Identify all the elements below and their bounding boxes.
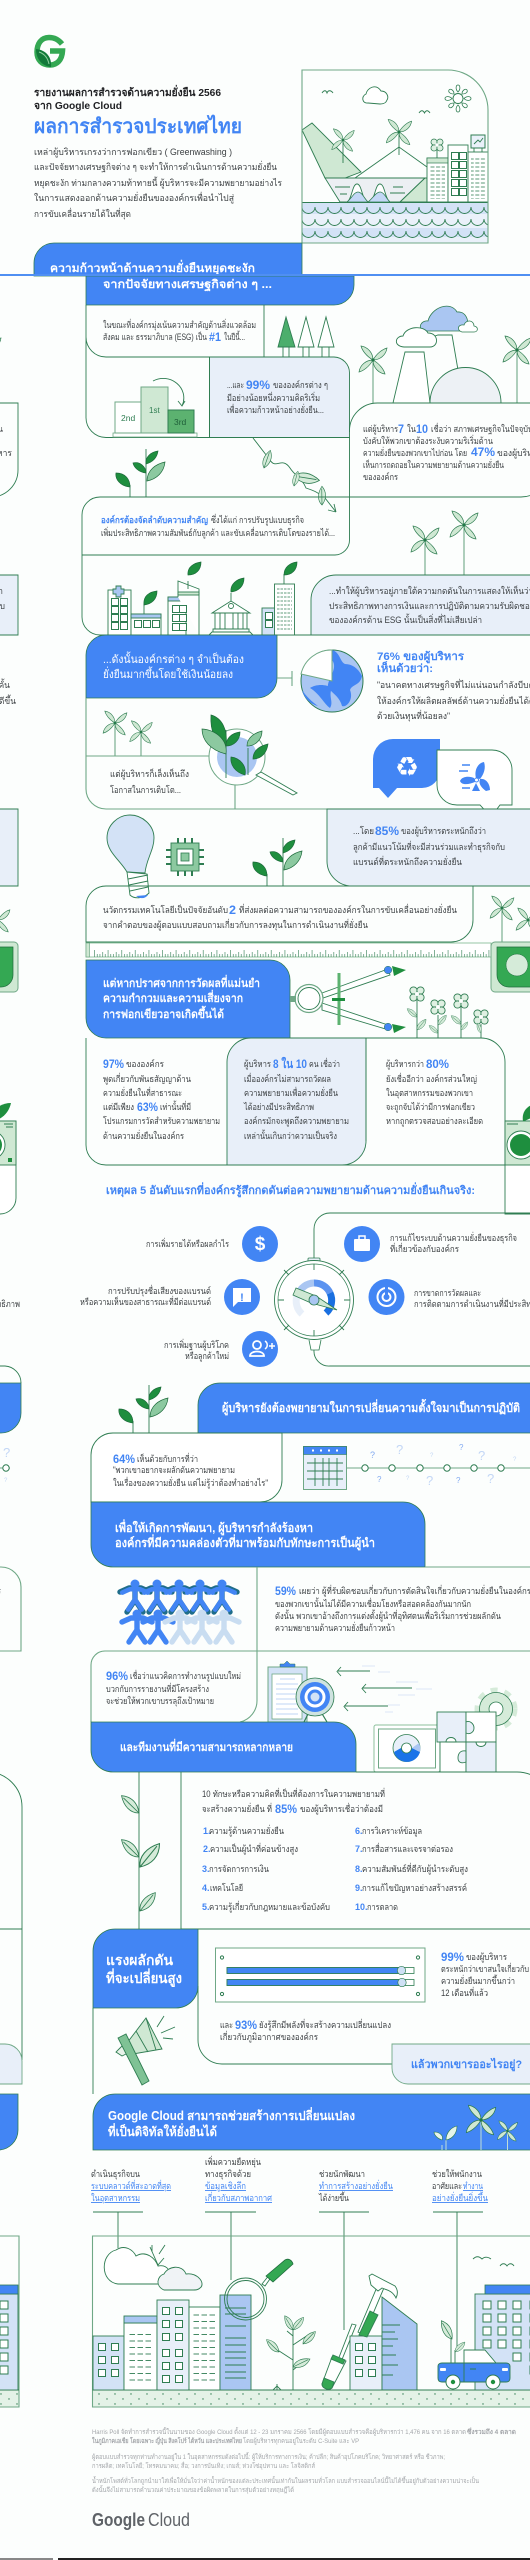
illustration: city frame — [92, 2236, 530, 2407]
column: clean cloud: ระบบคลาวด์ที่สะอาดที่สุด — [91, 2179, 171, 2192]
footer notes — [92, 2426, 516, 2494]
column: employees: อาศัยและ — [432, 2181, 462, 2191]
chart: sliders — [216, 1948, 425, 2002]
text: organisations must prioritise: ซึ่งได้แก่ การปรับรูปแบบธุรกิจ — [211, 513, 304, 526]
callout: what are they waiting for — [392, 2044, 530, 2084]
panel: diverse teams: และทีมงานที่มีความสามารถหลากหลาย — [120, 1738, 293, 1754]
main body, shifted slice that wraps at the right edge — [80, 276, 530, 2407]
icon: lightbulb — [107, 815, 154, 898]
panel: without accurate measurement: ความกำกวมและความเสี่ยงจาก — [103, 989, 243, 1005]
icon: megaphone — [116, 2016, 175, 2085]
reason: new customers — [164, 1331, 278, 1367]
text: 59%: 59% — [275, 1584, 296, 1598]
icon: compass — [290, 966, 406, 1033]
column: climate insights: ข้อมูลเชิงลึก — [205, 2181, 246, 2192]
text: 76% of executives: เห็นด้วยว่า: — [377, 661, 433, 675]
panel: 85% customers: ลูกค้ามีแนวโน้มที่จะมีส่วนร่วมและทำธุรกิจกับ — [353, 840, 505, 853]
footer notes: ผู้ตอบแบบสำรวจทุกท่านทำงานอยู่ใน 1 ในอุตสาหกรรมดังต่อไปนี้: ผู้ให้บริการทางการเงิน; ค้าปลีก; สินค้าอุปโภคบริโภค; วิทยาศาสตร์ หรือ ชีวภาพ; — [92, 2452, 445, 2461]
list: skills one to five: 4. — [202, 1883, 210, 1893]
truck — [437, 2285, 530, 2390]
icon: clipboard and target with arrows — [268, 1661, 432, 1722]
panel: ESG outline — [86, 305, 350, 438]
text: 8 in 10: ได้อย่างมีประสิทธิภาพ — [243, 1102, 314, 1112]
list: skills six to ten: การแก้ไขปัญหาอย่างสร้างสรรค์ — [362, 1882, 467, 1893]
icon: sprout — [116, 449, 165, 497]
list: skills six to ten: การสื่อสารและเจรจาต่อรอง — [362, 1842, 453, 1854]
panel: 7 in 10 and priorities outline — [82, 403, 530, 635]
text: 80% — [386, 1057, 483, 1127]
text: ESG number one: ในขณะที่องค์กรมุ่งเน้นความสำคัญด้านสิ่งแวดล้อม — [103, 318, 256, 331]
title block — [34, 84, 242, 138]
column: clean cloud: ดำเนินธุรกิจบน — [91, 2169, 140, 2180]
text: 96% — [106, 1669, 241, 1707]
column: climate insights: เพิ่มความยืดหยุ่น — [205, 2155, 261, 2168]
text: 99% executives — [441, 1950, 529, 1998]
text: 80%: 80% — [426, 1057, 449, 1071]
column: employees — [432, 2169, 488, 2350]
text: 7 in 10: ขององค์กร — [363, 471, 398, 482]
icon: calendar timeline with question marks — [304, 1442, 530, 1490]
chart: globe pie 76% — [301, 650, 363, 712]
panel: high drive to change — [93, 1929, 198, 2008]
text: 8 in 10: คน เชื่อว่า — [309, 1057, 340, 1069]
text: 97% and 63%: 97% — [103, 1057, 124, 1071]
text: 96%: เชื่อว่าแนวคิดการทำงานรูปแบบใหม่ — [130, 1669, 241, 1682]
text: 99% executives: 99% — [441, 1950, 464, 1964]
text: 99%: 99% — [246, 378, 270, 392]
panel: 85% customers: ...โดย — [353, 826, 374, 836]
text: 76% of executives: ด้วยเงินทุนที่น้อยลง" — [377, 709, 450, 722]
text: 93%: ยังรู้สึกมีพลังที่จะสร้างความเปลี่ยนแปลง — [259, 2018, 391, 2031]
list: skills six to ten — [355, 1825, 468, 1912]
icon: sprout — [119, 1385, 168, 1433]
list: skills one to five: 5. — [202, 1902, 210, 1912]
text: 97% and 63%: พูดเกี่ยวกับพันธสัญญาด้าน — [103, 1072, 191, 1085]
column: developers — [318, 2169, 393, 2330]
list: skills one to five: 1. — [203, 1826, 211, 1836]
banner: Google Cloud can help — [93, 2094, 530, 2150]
intro paragraph — [34, 147, 282, 220]
logo: Google Cloud: Cloud — [148, 2510, 190, 2530]
plant — [266, 2316, 315, 2390]
text: 7 in 10: แต่ผู้บริหาร — [363, 424, 398, 435]
reason: lack of measurement — [368, 1279, 530, 1315]
icon: calendar timeline with question marks: ? — [377, 1475, 382, 1484]
column: climate insights: เกี่ยวกับสภาพอากาศ — [205, 2191, 272, 2203]
icon: magnifier with leaves — [202, 715, 297, 795]
icon: calendar timeline with question marks: ? — [487, 1471, 494, 1486]
heading bar top slice: ความก้าวหน้าด้านความยั่งยืนหยุดชะงัก — [50, 259, 255, 276]
intro paragraph: การขับเคลื่อนรายได้ในที่สุด — [34, 207, 131, 220]
panel: 85% customers — [327, 809, 530, 886]
text: 76% of executives: 76% ของผู้บริหาร — [377, 650, 464, 664]
icon: recycle speech bubble: ♻ — [395, 752, 419, 783]
column: employees: ช่วยให้พนักงาน — [432, 2169, 482, 2179]
text: 7 in 10: 7 — [398, 422, 404, 436]
intro paragraph: และปัจจัยทางเศรษฐกิจต่าง ๆ จะทำให้การดำเนินการด้านความยั่งยืน — [34, 160, 277, 173]
column: employees: อย่างยั่งยืนยิ่งขึ้น — [432, 2191, 488, 2203]
column: climate insights: ทางธุรกิจด้วย — [205, 2169, 251, 2180]
panel: agile organisations: เพื่อให้เกิดการพัฒนา, ผู้บริหารกำลังร้องหา — [115, 1519, 313, 1536]
intro paragraph: เหล่าผู้บริหารเกรงว่าการฟอกเขียว ( Greenwashing ) — [34, 147, 232, 158]
panel: 85% customers: ของผู้บริหารตระหนักถึงว่า — [401, 826, 486, 837]
text: ten skills intro: จะสร้างความยั่งยืน ที่ — [202, 1802, 272, 1814]
text: 8 in 10: ผู้บริหาร — [244, 1059, 271, 1070]
text: 96%: 96% — [106, 1669, 128, 1683]
icon: trees — [278, 317, 334, 357]
footer notes: น้ำหนักโพสต์ทั่วโลกถูกนำมาใส่เพื่อให้มั่นใจว่าค่าน้ำหนักของแต่ละประเทศนั้นเท่ากันในผลรวมทั่วโลก แบบสำรวจออนไลน์นี้ไม่ได้ขึ้นอยู่กับตัวอย่างความน่าจะเป็น — [92, 2476, 479, 2485]
text: 96%: บวกกับการรายงานที่มีโครงสร้าง — [106, 1682, 209, 1694]
text: organisations must prioritise — [101, 513, 335, 539]
reason: revenue: $ — [255, 1234, 266, 1255]
panel: 99% pale box — [210, 357, 350, 438]
text: 59%: ของพวกเขานั้นไม่ได้มีความเชื่อมโยงหรือสอดคล้องกันมากนัก — [275, 1597, 471, 1609]
text: 76% of executives — [377, 650, 530, 722]
panel: 64%: ในเรื่องของความยั่งยืน แต่ไม่รู้ว่าต้องทำอย่างไร" — [113, 1476, 268, 1489]
column: employees: ทำงาน — [463, 2181, 483, 2191]
text: opportunities: แต่ผู้บริหารก็เล็งเห็นถึง — [110, 767, 189, 780]
icon: calendar timeline with question marks: ? — [426, 1473, 433, 1488]
illustration: factory — [393, 306, 501, 403]
panel: pressure on executives — [311, 575, 530, 635]
title block: รายงานผลการสำรวจด้านความยั่งยืน 2566 — [34, 84, 221, 99]
text: 7 in 10: 10 — [416, 422, 428, 436]
list: skills one to five: ความรู้เกี่ยวกับกฎหมายและข้อบังคับ — [209, 1900, 330, 1913]
stripe across slice seam — [0, 274, 530, 276]
icon: windmills by factory — [359, 336, 530, 403]
panel outline: ten skills — [139, 1772, 530, 2060]
logo: Google Cloud — [92, 2510, 190, 2530]
panel: high drive to change: แรงผลักดัน — [106, 1952, 173, 1968]
text: 96%: จะช่วยให้พวกเขาบรรลุถึงเป้าหมาย — [106, 1696, 214, 1707]
column: clean cloud — [91, 2169, 171, 2248]
text: 99% executives: ความยั่งยืนมากขึ้นกว่า — [441, 1974, 515, 1986]
panel: without accurate measurement — [86, 960, 290, 1038]
icon: calendar timeline with question marks: ? — [456, 1476, 461, 1485]
list: skills one to five: ความรู้ด้านความยั่งยืน — [209, 1824, 284, 1837]
screwdriver — [322, 2324, 356, 2389]
text: ten skills intro: 10 ทักษะหรือความคิดที่เป็นที่ต้องการในความพยายามที่ — [202, 1787, 385, 1799]
text: 80%: หากถูกตรวจสอบอย่างละเอียด — [386, 1116, 483, 1127]
icon: calendar timeline with question marks: ? — [370, 1450, 375, 1460]
icon: sprout — [253, 838, 302, 886]
text: ten skills intro: 85% — [275, 1802, 297, 1816]
panel: 64%: "พวกเขาอยากจะผลักดันความพยายาม — [113, 1465, 235, 1475]
list: skills one to five: เทคโนโลยี — [210, 1883, 243, 1893]
list: skills six to ten: 8. — [355, 1864, 363, 1874]
panel: diverse teams — [91, 1722, 356, 1772]
intro paragraph: หยุดชะงัก ท่ามกลางความท้าทายนี้ ผู้บริหารจะมีความพยายามอย่างไร — [34, 176, 282, 189]
text: opportunities — [110, 767, 189, 795]
text: 99% executives: 12 เดือนที่แล้ว — [441, 1986, 488, 1998]
text: ESG number one: #1 — [209, 330, 221, 344]
text: 80%: ผู้บริหารกว่า — [386, 1059, 424, 1070]
text: 99%: ขององค์กรต่าง ๆ — [273, 379, 328, 390]
text: 93%: เกี่ยวกับภูมิอากาศขององค์กร — [220, 2030, 318, 2043]
panel outline: 59% — [91, 1567, 530, 1722]
text: 97% and 63%: ขององค์กร — [126, 1058, 164, 1069]
text: 8 in 10: องค์กรมักจะพูดถึงความพยายาม — [244, 1115, 349, 1127]
panel: without accurate measurement: แต่หากปราศจากการวัดผลที่แม่นยำ — [103, 974, 260, 990]
footer notes: ในภูมิภาคเอเชีย โดยเฉพาะ ญี่ปุ่น สิงคโปร์ ไต้หวัน และประเทศไทย — [92, 2435, 242, 2446]
panel: 64% — [91, 1433, 282, 1502]
reason: revenue — [146, 1226, 278, 1262]
text: 99% executives: ของผู้บริหาร — [466, 1952, 507, 1963]
text: 97% and 63%: 63% — [137, 1100, 158, 1114]
callout: what are they waiting for: แล้วพวกเขารออะไรอยู่? — [411, 2057, 522, 2072]
panel: 64%: เห็นด้วยกับการที่ว่า — [137, 1452, 198, 1464]
chart: podium: 2nd — [121, 413, 135, 423]
hammer — [358, 2274, 397, 2337]
logo: Google Cloud: Google — [92, 2510, 145, 2530]
list: skills six to ten: 7. — [355, 1844, 363, 1854]
icon: monitor with donut chart — [374, 1725, 440, 1772]
text: 8 in 10: เหล่านั้นเกินกว่าความเป็นจริง — [244, 1129, 337, 1141]
text: 59%: ความพยายามด้านความยั่งยืนก้าวหน้า — [275, 1621, 395, 1633]
panel: technology ranked 2: 2 — [229, 903, 236, 917]
text: ten skills intro — [202, 1787, 385, 1816]
icon: people chain — [120, 1580, 239, 1642]
icon: calendar timeline with question marks: ? — [396, 1442, 403, 1457]
list: skills one to five: ความเป็นผู้นำที่ค่อนข้างสูง — [210, 1842, 298, 1855]
text: 99% — [227, 378, 328, 415]
list: skills one to five: 2. — [203, 1844, 211, 1854]
reason: brand reputation: การปรับปรุงชื่อเสียงของแบรนด์ — [108, 1284, 211, 1297]
icon: recycle speech bubble — [373, 739, 440, 798]
reason: revenue: การเพิ่มรายได้หรือผลกำไร — [146, 1237, 229, 1249]
list: skills six to ten: การตลาด — [367, 1902, 398, 1912]
intro paragraph: ในการแสดงออกด้านความยั่งยืนขององค์กรเพื่อนำไปสู่ — [34, 191, 234, 204]
text: 7 in 10 — [363, 422, 530, 482]
column: clean cloud: ในอุตสาหกรรม — [91, 2193, 140, 2204]
panel: so organisations must be more sustainable: ยั่งยืนมากขึ้นโดยใช้เงินน้อยลง — [103, 666, 233, 681]
icon: windmills over pale panel — [411, 511, 478, 575]
text: 7 in 10: ความยั่งยืนของพวกเขาไปก่อน โดย — [363, 446, 467, 458]
text: 7 in 10: ใน — [407, 424, 416, 434]
title block: ผลการสำรวจประเทศไทย — [34, 114, 242, 138]
panel: agile organisations: องค์กรที่มีความคล่องตัวที่มาพร้อมกับทักษะการเป็นผู้นำ — [115, 1534, 375, 1551]
panel: 85% customers: แบรนด์ที่ตระหนักถึงความยั่งยืน — [353, 855, 462, 867]
heading: top 5 reasons: เหตุผล 5 อันดับแรกที่องค์กรรู้สึกกดดันต่อความพยายามด้านความยั่งยืนเกินจริง: — [106, 1182, 475, 1198]
icon: vine with arrow — [253, 438, 336, 512]
icon: calendar timeline with question marks: ? — [513, 1457, 517, 1463]
icon: calendar timeline with question marks: ? — [459, 1443, 464, 1452]
panel outline: reasons — [314, 1213, 530, 1383]
reason: brand reputation: ! — [240, 1292, 244, 1304]
chart: podium — [113, 378, 197, 437]
footer notes: การผลิต; เทคโนโลยี; โทรคมนาคม; สื่อ; วงการบันเทิง; เกมส์; ห่วงโซ่อุปทาน และ โลจิสติกส์ — [92, 2461, 315, 2470]
text: 99%: ...และ — [227, 380, 244, 390]
panel outline: opportunity — [86, 671, 530, 809]
list: skills one to five: 3. — [202, 1864, 210, 1874]
list: skills one to five: การจัดการการเงิน — [209, 1864, 269, 1874]
clouds — [104, 2245, 202, 2290]
reason: fixing business sustainability: ที่เกี่ยวข้องกับองค์กร — [390, 1242, 459, 1254]
text: ten skills intro: ของผู้บริหารเชื่อว่าต้องมี — [300, 1802, 383, 1815]
text: 8 in 10 — [243, 1056, 349, 1141]
column: climate insights — [205, 2155, 272, 2280]
text: 93% — [220, 2018, 391, 2043]
text: 8 in 10: 8 ใน 10 — [273, 1056, 307, 1071]
footer notes: ซึ่งรวมถึง 4 ตลาด — [467, 2426, 516, 2436]
icon: washing machine — [505, 1103, 530, 1214]
birds — [473, 2257, 514, 2266]
panel: technology ranked 2: นวัตกรรมเทคโนโลยีเป็นปัจจัยอันดับ — [103, 903, 228, 915]
panel outline: 99% and 93% — [93, 1986, 392, 2094]
text: ESG number one — [103, 318, 256, 344]
reason: brand reputation: หรือความเห็นของสาธารณะที่มีต่อแบรนด์ — [80, 1295, 211, 1307]
panel: agile organisations — [91, 1502, 425, 1567]
heading bar lower slice: จากปัจจัยทางเศรษฐกิจต่าง ๆ ... — [103, 278, 272, 292]
chart: gauge — [274, 1258, 354, 1350]
text: 97% and 63% — [103, 1057, 220, 1141]
buildings centre — [350, 2297, 417, 2390]
list: skills six to ten: 6. — [355, 1826, 363, 1836]
banner: intent to action — [198, 1383, 530, 1433]
icon: ruler — [86, 943, 491, 957]
text: 80%: ยังเชื่ออีกว่า องค์กรส่วนใหญ่ — [386, 1072, 477, 1084]
magnifier — [224, 2259, 293, 2320]
reason: fixing business sustainability — [344, 1226, 517, 1262]
text: 99%: มีอย่างน้อยหนึ่งความคิดริเริ่ม — [227, 391, 320, 403]
heading bar top slice — [34, 243, 302, 276]
panel: technology ranked 2: จากคำตอบของผู้ตอบแบบสอบถามเกี่ยวกับการลงทุนในการดำเนินงานที่ยั่งยืน — [103, 918, 368, 931]
text: ESG number one: สังคม และ ธรรมาภิบาล (ESG) เป็น — [103, 330, 207, 342]
icon: puzzle — [437, 1712, 496, 1772]
icon: calendar timeline with question marks: ? — [406, 1476, 410, 1482]
text: 80%: ในอุตสาหกรรมของพวกเขา — [386, 1088, 473, 1099]
list: skills six to ten: ความสัมพันธ์ที่ดีกับผู้นำระดับสูง — [362, 1862, 468, 1875]
icon: vine leaves — [120, 1796, 160, 1911]
title block: จาก Google Cloud — [34, 100, 122, 112]
footer notes: ดังนั้นจึงไม่สามารถคำนวณค่าประมาณของข้อผิดพลาดในการสุ่มตัวอย่างทฤษฎีได้ — [92, 2485, 294, 2494]
column: developers: ช่วยนักพัฒนา — [319, 2169, 365, 2179]
panel: technology ranked 2 — [86, 886, 473, 942]
illustration: city with leaves — [108, 562, 297, 635]
icon: chip — [166, 838, 204, 876]
logo: leaf G — [36, 38, 62, 67]
icon: small windmills and battery block — [490, 896, 530, 992]
reason: lack of measurement: การขาดการวัดผลและ — [414, 1288, 481, 1298]
list: skills six to ten: 10. — [355, 1902, 368, 1912]
panel: pressure on executives: ขององค์กรด้าน ESG นั้นเป็นสิ่งที่ไม่เสียเปล่า — [329, 613, 482, 625]
panel: without accurate measurement: การฟอกเขียวอาจเกิดขึ้นได้ — [103, 1005, 224, 1021]
text: 8 in 10: เมื่อองค์กรไม่สามารถวัดผล — [244, 1072, 331, 1084]
reason: new customers: หรือลูกค้าใหม่ — [185, 1351, 229, 1362]
icon: calendar timeline with question marks: ? — [478, 1448, 485, 1463]
panel: technology ranked 2: ที่ส่งผลต่อความสามารถขององค์กรในการขับเคลื่อนอย่างยั่งยืน — [239, 903, 457, 915]
footer notes: โดยผู้บริหารทุกคนอยู่ในระดับ C-Suite และ VP — [243, 2437, 359, 2445]
text: organisations must prioritise: องค์กรต้องจัดลำดับความสำคัญ — [101, 514, 208, 526]
text: 7 in 10: 47% — [471, 445, 495, 459]
list: skills six to ten: 9. — [355, 1883, 363, 1893]
wrapped strip at left edge — [0, 276, 22, 2407]
chart: podium: 3rd — [174, 417, 187, 427]
panel: measurement statistics — [86, 1038, 505, 1165]
text: 99%: เพื่อความก้าวหน้าอย่างยั่งยืน... — [227, 403, 324, 415]
list: skills six to ten: การวิเคราะห์ข้อมูล — [362, 1825, 422, 1837]
icon: gear — [477, 1690, 515, 1728]
banner: Google Cloud can help: Google Cloud สามารถช่วยสร้างการเปลี่ยนแปลง — [108, 2107, 355, 2123]
text: 97% and 63%: โปรแกรมการวัดสำหรับความพยายาม — [103, 1116, 220, 1126]
heading bar lower slice — [86, 276, 354, 305]
text: 97% and 63%: ความยั่งยืนในที่สาธารณะ — [103, 1086, 182, 1098]
chart: podium: 1st — [149, 406, 160, 415]
icon: turbine speech bubble — [437, 750, 512, 817]
icon: calendar timeline with question marks: ? — [430, 1453, 434, 1459]
illustration: landscape with city and dam — [302, 70, 488, 243]
text: 93%: และ — [220, 2020, 233, 2030]
column: developers: ทำการสร้างอย่างยั่งยืน — [319, 2179, 393, 2191]
panel: 64%: 64% — [113, 1452, 135, 1466]
panel: so organisations must be more sustainable: ...ดังนั้นองค์กรต่าง ๆ จำเป็นต้อง — [103, 651, 244, 666]
reason: new customers: การเพิ่มฐานผู้บริโภค — [164, 1338, 229, 1351]
icon: windmills small — [103, 711, 152, 756]
panel: 85% customers: 85% — [375, 824, 399, 838]
text: opportunities: โอกาสในการเติบโต... — [110, 785, 181, 795]
text: 97% and 63%: ด้านความยั่งยืนในองค์กร — [103, 1129, 184, 1141]
text: 59% — [275, 1584, 530, 1633]
reason: brand reputation — [80, 1279, 260, 1315]
banner: Google Cloud can help: ที่เป็นดิจิทัลให้ยั่งยืนได้ — [108, 2123, 217, 2139]
panel: high drive to change: ที่จะเปลี่ยนสูง — [106, 1968, 182, 1987]
text: 97% and 63%: เท่านั้นที่มี — [160, 1100, 191, 1112]
text: ESG number one: ในปีนี้... — [224, 330, 245, 342]
list: skills one to five — [202, 1824, 330, 1913]
panel: so organisations must be more sustainable — [86, 635, 277, 698]
text: organisations must prioritise: เพิ่มประสิทธิภาพความสัมพันธ์กับลูกค้า และขับเคลื่อนการเติบโตของรายได้... — [101, 526, 335, 539]
icon: flowers — [407, 987, 488, 1038]
text: 8 in 10: ความพยายามเพื่อความยั่งยืน — [244, 1086, 338, 1098]
bottom edge band — [0, 2558, 530, 2560]
footer notes: Harris Poll จัดทำการสำรวจนี้ในนามของ Google Cloud ตั้งแต่ 12 - 23 มกราคม 2566 โดยมีผู้ตอบแบบสำรวจคือผู้บริหารกว่า 1,476 คน จาก 16 ตลาด — [92, 2427, 466, 2436]
text: 93%: 93% — [235, 2018, 257, 2032]
buildings left — [93, 2295, 251, 2390]
text: 7 in 10: บังคับให้พวกเขาต้องระงับความริเริ่มด้าน — [363, 434, 493, 446]
text: 97% and 63%: แต่มีเพียง — [103, 1102, 134, 1112]
text: 80%: จะถูกจับได้ว่ามีการฟอกเขียว — [386, 1102, 475, 1113]
column: developers: ได้ง่ายขึ้น — [318, 2191, 349, 2203]
